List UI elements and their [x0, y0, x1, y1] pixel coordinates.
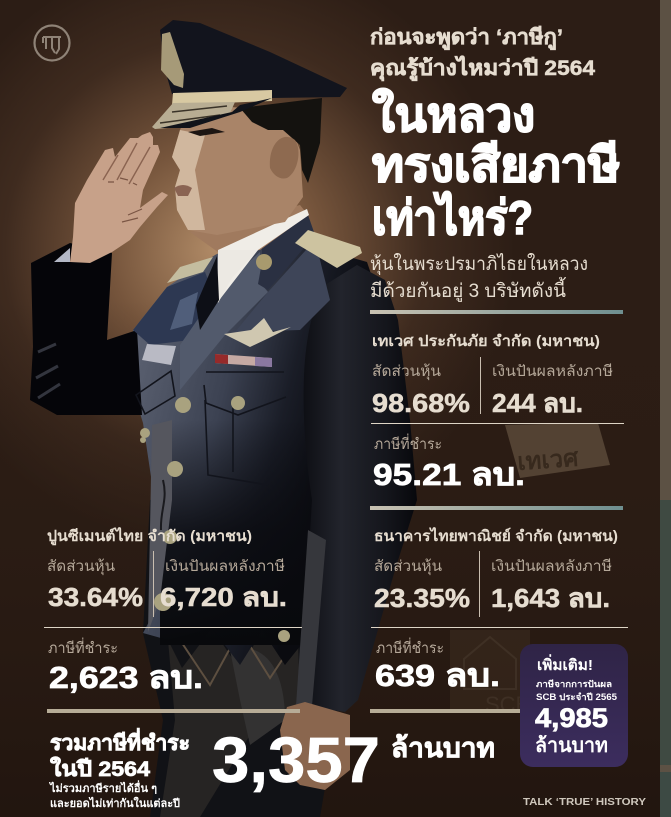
- neck: [190, 205, 308, 255]
- panel: Siam Cement: ภาษีที่ชำระ: [48, 637, 118, 657]
- subheading: มีด้วยกันอยู่ 3 บริษัทดังนี้: [370, 277, 566, 302]
- ribbon bar: [215, 354, 272, 367]
- wings badge: [224, 318, 291, 347]
- panel: Siam Commercial Bank: ภาษีที่ชำระ: [376, 637, 444, 657]
- panel: Siam Commercial Bank: 23.35%: [374, 583, 470, 613]
- epaulette right: [295, 230, 362, 268]
- hair: [240, 98, 322, 183]
- face: [172, 105, 303, 235]
- panel: Siam Cement: เงินปันผลหลังภาษี: [165, 558, 285, 575]
- panel: purple callout: SCB ประจำปี 2565: [536, 692, 617, 702]
- heading intro: [370, 25, 595, 82]
- lower hand: [280, 702, 350, 790]
- panel: Siam Cement: สัดส่วนหุ้น: [47, 558, 115, 576]
- epaulette left: [167, 257, 213, 283]
- panel: Siam Cement: [44, 526, 302, 695]
- panel: purple callout: เพิ่มเติม!: [537, 654, 593, 674]
- buttons: [140, 396, 290, 642]
- right sleeve: [300, 265, 417, 712]
- total label: ในปี 2564: [50, 756, 150, 781]
- cap crown: [160, 20, 347, 98]
- panel: Thevet Insurance: 244 ลบ.: [492, 388, 583, 418]
- heading intro: คุณรู้บ้างไหมว่าปี 2564: [370, 55, 595, 82]
- trousers and coat skirt: [143, 400, 390, 817]
- panel: Thevet Insurance: 98.68%: [372, 388, 470, 418]
- divider bar: [370, 310, 623, 314]
- saluting sleeve: [30, 243, 142, 415]
- panel: Siam Commercial Bank: สัดส่วนหุ้น: [374, 558, 442, 576]
- logo: [34, 26, 70, 60]
- saluting hand: [70, 132, 168, 263]
- panel: Thevet Insurance: เงินปันผลหลังภาษี: [492, 363, 613, 380]
- main title: [372, 87, 620, 244]
- pockets: [136, 371, 286, 485]
- shirt cuff: [54, 248, 70, 262]
- total label: และยอดไม่เท่ากันในแต่ละปี: [50, 796, 180, 810]
- main title: เท่าไหร่?: [372, 190, 533, 244]
- panel: Thevet Insurance: 95.21 ลบ.: [373, 457, 525, 492]
- panel: Thevet Insurance: สัดส่วนหุ้น: [372, 363, 441, 381]
- panel: Thevet Insurance: ภาษีที่ชำระ: [374, 433, 442, 453]
- panel: Siam Commercial Bank: เงินปันผลหลังภาษี: [491, 558, 612, 575]
- right edge strip: [660, 0, 671, 817]
- panel: Siam Cement: 2,623 ลบ.: [49, 660, 203, 695]
- panel: Siam Commercial Bank: ธนาคารไทยพาณิชย์ จำกัด (มหาชน): [374, 526, 618, 545]
- faint sign: Thevet: [505, 423, 610, 478]
- total figure: 3,357: [212, 724, 380, 796]
- total unit: ล้านบาท: [391, 733, 495, 763]
- faint sign: SCB: SCB: [485, 692, 530, 717]
- panel: Siam Commercial Bank: 1,643 ลบ.: [491, 583, 610, 613]
- credit: TALK ‘TRUE’ HISTORY: [523, 796, 646, 808]
- main title: ในหลวง: [372, 87, 535, 141]
- panel: Siam Cement: ปูนซีเมนต์ไทย จำกัด (มหาชน): [47, 526, 252, 546]
- subheading: หุ้นในพระปรมาภิไธยในหลวง: [370, 253, 588, 276]
- panel: purple callout: 4,985: [535, 703, 608, 733]
- panel: Siam Commercial Bank: 639 ลบ.: [375, 658, 500, 693]
- shirt collar: [217, 209, 309, 303]
- ear: [270, 137, 298, 179]
- figure: saluting officer: [30, 20, 417, 817]
- panel: purple callout: [520, 644, 628, 767]
- faint sign: Thevet: เทเวศ: [517, 445, 580, 476]
- panel: purple callout: ภาษีจากการปันผล: [536, 679, 612, 689]
- main title: ทรงเสียภาษี: [372, 138, 620, 191]
- lapel: [180, 252, 268, 390]
- cap band: [172, 90, 272, 105]
- tie: [196, 256, 219, 330]
- panel: Thevet Insurance: เทเวศ ประกันภัย จำกัด (มหาชน): [372, 333, 600, 350]
- faint sign: SCB: [450, 630, 530, 717]
- coat: [133, 232, 395, 665]
- visor leaves: [152, 102, 235, 129]
- panel: Siam Commercial Bank: [371, 526, 628, 693]
- collar badge: [256, 254, 272, 270]
- grey coat front edge: [148, 420, 172, 632]
- panel: purple callout: ล้านบาท: [535, 734, 608, 757]
- subheading: [370, 253, 588, 302]
- panel: Thevet Insurance: [371, 333, 624, 492]
- total label: [48, 727, 190, 810]
- total label: รวมภาษีที่ชำระ: [50, 727, 190, 755]
- name badges: [142, 344, 176, 365]
- cap badge: [161, 32, 184, 88]
- total label: ไม่รวมภาษีรายได้อื่น ๆ: [48, 780, 157, 795]
- shoulder upper left: [133, 272, 212, 345]
- panel: Siam Cement: 6,720 ลบ.: [160, 582, 287, 612]
- heading intro: ก่อนจะพูดว่า ‘ภาษีกู’: [370, 25, 563, 51]
- panel: Siam Cement: 33.64%: [48, 582, 143, 612]
